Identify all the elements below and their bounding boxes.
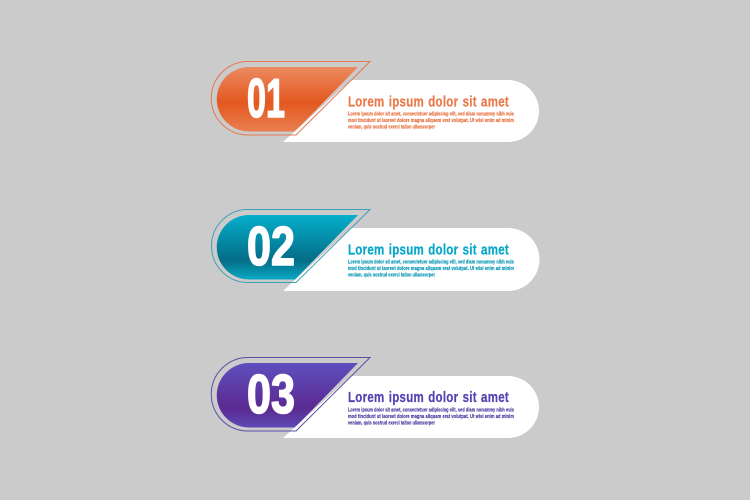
white text panel	[283, 376, 539, 438]
item 02	[212, 210, 540, 291]
heading: Lorem ipsum dolor sit amet	[348, 242, 509, 258]
purple tab	[217, 363, 358, 428]
body text: mod tincidunt ut laoreet dolore magna aliquam erat volutpat. Ut wisi enim ad minim	[348, 414, 514, 420]
teal outline	[212, 210, 370, 282]
item 03	[211, 358, 539, 438]
orange outline	[211, 62, 370, 135]
white text panel	[283, 80, 539, 142]
number 03: 03	[247, 363, 295, 425]
body text: Lorem ipsum dolor sit amet, consectetuer adipiscing elit, sed diam nonummy nibh eu­is­	[348, 260, 514, 266]
body text: mod tincidunt ut laoreet dolore magna aliquam erat volutpat. Ut wisi enim ad minim	[348, 118, 514, 124]
orange tab	[217, 67, 358, 132]
white text panel	[283, 228, 540, 291]
teal tab	[217, 215, 358, 280]
body text: veniam, quis nostrud exerci tation ullamcorper	[348, 272, 435, 278]
body text	[348, 112, 514, 130]
body text: mod tincidunt ut laoreet dolore magna aliquam erat volutpat. Ut wisi enim ad minim	[348, 266, 514, 272]
heading: Lorem ipsum dolor sit amet	[348, 94, 509, 110]
body text	[348, 408, 514, 426]
body text: Lorem ipsum dolor sit amet, consectetuer adipiscing elit, sed diam nonummy nibh eu­is­	[348, 408, 514, 414]
body text: Lorem ipsum dolor sit amet, consectetuer adipiscing elit, sed diam nonummy nibh eu­is­	[348, 112, 514, 118]
heading: Lorem ipsum dolor sit amet	[348, 389, 509, 406]
body text: veniam, quis nostrud exerci tation ullamcorper	[348, 420, 435, 426]
body text: veniam, quis nostrud exerci tation ullamcorper	[348, 124, 435, 130]
item 01	[211, 62, 539, 142]
body text	[348, 260, 514, 278]
purple outline	[211, 358, 370, 431]
number 01: 01	[247, 67, 285, 129]
number 02: 02	[247, 215, 295, 277]
